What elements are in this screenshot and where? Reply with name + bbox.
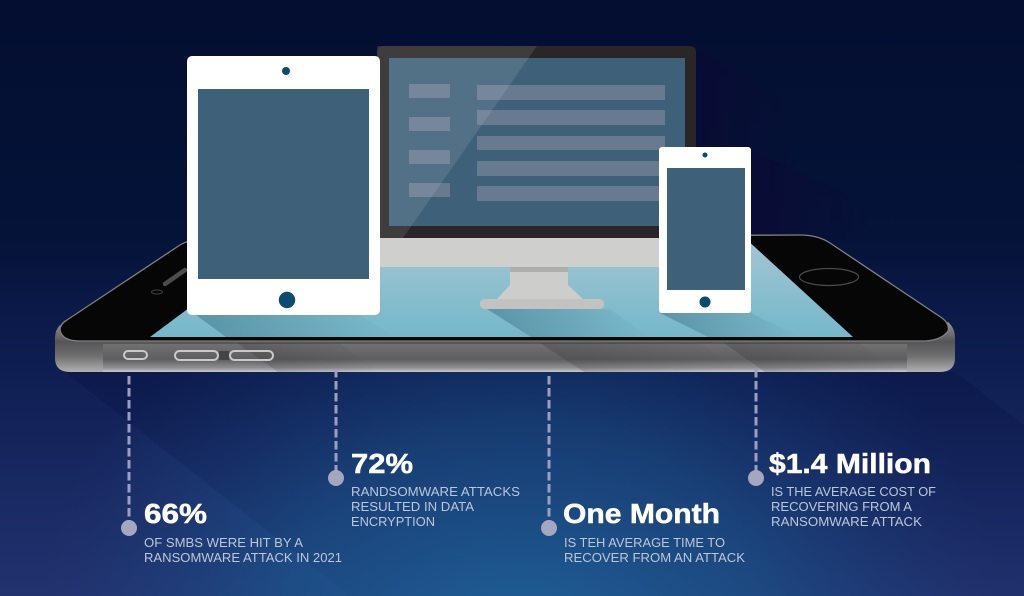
button gap	[219, 351, 229, 360]
description: IS THE AVERAGE COST OF	[771, 484, 936, 499]
stat: 72%	[328, 369, 520, 529]
tablet home button	[279, 292, 295, 308]
figure: 72%	[351, 448, 413, 479]
stat: $1.4 Million	[748, 369, 936, 529]
smartphone home button	[700, 296, 710, 308]
side buttons	[124, 351, 273, 360]
description: IS TEH AVERAGE TIME TO	[564, 535, 725, 550]
marker dot	[328, 470, 344, 486]
phone speaker	[165, 270, 185, 284]
monitor chin	[380, 238, 680, 267]
tablet body	[187, 56, 380, 315]
phone side edge	[55, 322, 955, 372]
long shadow below phone	[65, 372, 1024, 596]
tablet	[187, 56, 380, 315]
marker dot	[121, 520, 137, 536]
connector line	[128, 376, 130, 522]
phone side centre band	[103, 344, 907, 372]
desktop monitor	[377, 46, 696, 309]
tablet screen	[198, 89, 369, 279]
marker dot	[541, 520, 557, 536]
tablet camera	[282, 67, 290, 75]
description: RECOVER FROM AN ATTACK	[564, 550, 745, 565]
description: RANSOMWARE ATTACK IN 2021	[144, 550, 342, 565]
connector line	[754, 369, 758, 472]
figure: 66%	[144, 498, 207, 529]
phone home button	[800, 268, 858, 286]
smartphone	[659, 147, 751, 313]
phone black face	[60, 235, 948, 341]
monitor stand base shade	[480, 299, 604, 309]
smartphone body	[659, 147, 751, 313]
long shadow behind smartphone	[751, 150, 880, 240]
monitor glare	[377, 46, 537, 238]
connector line	[548, 376, 550, 522]
phone front camera	[152, 290, 162, 294]
description: OF SMBS WERE HIT BY A	[144, 535, 303, 550]
description: RESULTED IN DATA	[351, 499, 474, 514]
connector line	[334, 369, 338, 472]
smartphone screen	[667, 168, 745, 290]
description: RANSOMWARE ATTACK	[771, 514, 922, 529]
stat: One Month	[541, 376, 745, 565]
monitor frame	[377, 46, 696, 238]
phone	[55, 235, 955, 372]
smartphone camera	[702, 152, 708, 158]
stat: 66%	[121, 376, 342, 565]
device shadows on screen	[196, 309, 800, 337]
description: RANDSOMWARE ATTACKS	[351, 484, 520, 499]
monitor neck shade	[510, 267, 568, 272]
monitor stand	[480, 267, 604, 309]
band shadows	[237, 343, 900, 372]
figure: $1.4 Million	[769, 448, 931, 479]
monitor left rows	[409, 84, 450, 197]
long shadow behind monitor	[696, 50, 800, 240]
figure: One Month	[563, 498, 720, 529]
monitor screen	[389, 58, 685, 226]
description: ENCRYPTION	[351, 514, 435, 529]
phone screen	[150, 238, 853, 337]
marker dot	[748, 470, 764, 486]
description: RECOVERING FROM A	[771, 499, 912, 514]
monitor right rows	[477, 85, 665, 201]
